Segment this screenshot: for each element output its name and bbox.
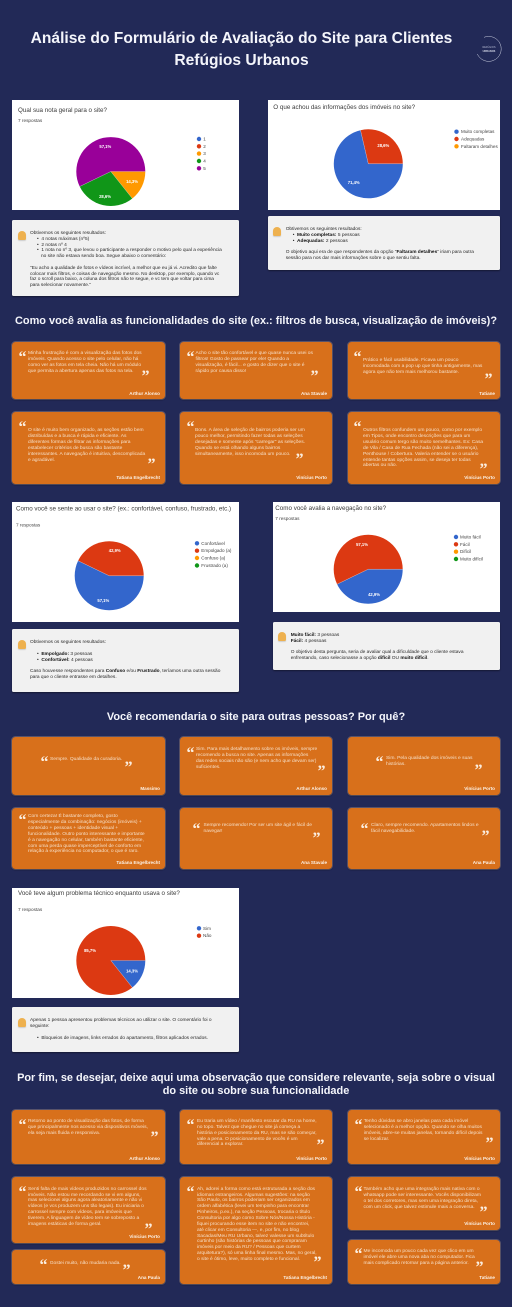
note text: para que o cliente entrasse em detalhes. <box>30 675 117 680</box>
card: Tatiane: mais complicado retornar para a página anterior. <box>364 1261 469 1266</box>
card: Arthur Alonso: ” <box>142 368 150 385</box>
card: Vinícius Porto: ” <box>316 1137 324 1154</box>
card: Ana Stavale: “ <box>192 821 200 838</box>
note text <box>290 632 464 661</box>
card: Vinícius Porto <box>348 737 500 795</box>
card: Tatiana Engelbrecht: idiomas estrangeiros. Algumas sugestões: na seção <box>197 1193 310 1198</box>
card: Vinícius Porto: Bons. A área de seleção de bairros poderia ser um <box>195 428 305 433</box>
card: Ana Stavale: filtros! Gosto de passear por ele! Quando a <box>196 357 289 362</box>
card: Vinícius Porto: ” <box>296 451 304 468</box>
note text: Fácil: 4 pessoas <box>291 639 326 644</box>
panel: como se sente chart: 57,1% <box>97 598 110 603</box>
note text: Obtivemos os seguintes resultados: <box>30 231 106 236</box>
card: Vinícius Porto <box>348 1110 500 1164</box>
card: Vinícius Porto: Vinícius Porto <box>464 475 495 480</box>
panel: informações dos imóveis chart <box>268 100 500 210</box>
card: Tatiana Engelbrecht: fiquei procurando esse item no site e não encontrei, <box>197 1222 309 1227</box>
card: Vinícius Porto: mas selecionei alguns agora aleatoriamente e não vi <box>28 1198 142 1203</box>
note text: O objetivo desta pergunta, seria de avaliar qual a dificuldade que o cliente estava <box>291 650 464 655</box>
card: Ana Stavale <box>180 342 332 399</box>
card: Massimo: ” <box>124 759 132 776</box>
panel: navegação chart: Muito difícil <box>460 556 483 562</box>
note text: Apenas 1 pessoa apresentou problemas técnicos ao utilizar o site. O comentário foi o <box>30 1018 212 1023</box>
panel: navegação chart: 7 respostas <box>275 516 300 521</box>
icon: note marker <box>278 632 286 641</box>
note text: "Eu acho a qualidade de fotos e vídeos incrível, a melhor que eu já vi. Acredito que falte <box>30 266 217 271</box>
card: Tatiana Engelbrecht: O site é muito bem organizado, as seções estão bem <box>28 428 144 433</box>
title: Análise do Formulário de Avaliação do Site para Clientes <box>31 30 452 47</box>
card: Arthur Alonso: “ <box>18 348 26 366</box>
panel: nota geral chart: 1 <box>203 136 206 142</box>
card: Massimo: Massimo <box>140 786 160 791</box>
note: problemas técnicos <box>12 1007 239 1052</box>
card: Vinícius Porto: história e posicionamento da RU, mas se são começar, <box>197 1131 317 1136</box>
card: Arthur Alonso: suficientes. <box>196 765 220 770</box>
card: Tatiana Engelbrecht: ” <box>148 456 156 473</box>
note: resultados sentimento <box>12 629 239 692</box>
card: Ana Stavale <box>180 808 332 869</box>
note: resultados nota geral <box>12 220 239 296</box>
panel: nota geral chart <box>12 100 239 210</box>
heading: observação final: do site ou sobre sua funcionalidade <box>163 1085 349 1097</box>
panel: informações dos imóveis chart: O que achou das informações dos imóveis no site? <box>273 104 416 111</box>
card: Ana Paula: ” <box>482 828 490 845</box>
panel: como se sente chart: 42,9% <box>109 548 121 553</box>
icon: note marker <box>18 230 26 240</box>
card: Vinícius Porto: ” <box>480 1204 488 1220</box>
panel: navegação chart <box>273 502 500 612</box>
note text: no site não estava sendo boa. Segue abaixo o comentário: <box>41 254 166 259</box>
card: Vinícius Porto: no topo. Talvez que chegue no site já começa a <box>197 1125 300 1130</box>
panel: navegação chart: Fácil <box>460 542 470 547</box>
note text: • Bloqueios de imagens, links errados do apartamento, filtros aplicados errados. <box>37 1036 208 1041</box>
panel: nota geral chart: 7 respostas <box>18 118 43 123</box>
card: Vinícius Porto: Vinícius Porto <box>464 786 495 791</box>
panel: nota geral chart: 4 <box>203 158 206 164</box>
card: Ana Stavale: “ <box>186 348 194 366</box>
icon: note marker <box>18 1018 26 1026</box>
panel: navegação chart: Como você avalia a navegação no site? <box>275 505 387 512</box>
card: Vinícius Porto: Tenho dúvidas se abro janelas para cada imóvel <box>364 1119 468 1124</box>
card: Tatiane: “ <box>354 1246 362 1263</box>
card: Ana Paula: “ <box>360 821 368 838</box>
card: Vinícius Porto: imóveis, abre-se muitas janelas, tornando difícil depois <box>364 1131 482 1136</box>
panel: como se sente chart <box>12 502 239 622</box>
note text <box>286 226 474 261</box>
panel: informações dos imóveis chart: 28,6% <box>377 143 390 148</box>
card: Vinícius Porto: diferencial a explorar. <box>197 1142 244 1147</box>
card: Vinícius Porto: “ <box>354 1117 362 1134</box>
card: Tatiana Engelbrecht: ordem alfabética (levei um tempinho para encontrar <box>197 1204 309 1209</box>
card: Tatiana Engelbrecht: São Paulo, os bairros poderiam ser organizados em <box>197 1198 310 1203</box>
card: Vinícius Porto <box>348 412 500 484</box>
card: Tatiana Engelbrecht: ” <box>314 1254 322 1271</box>
note text <box>30 1018 212 1041</box>
card: Tatiane: Tatiane <box>479 390 495 396</box>
card: Tatiana Engelbrecht: o site é ótimo, leve, muito completo e funcional. <box>197 1257 300 1262</box>
panel: nota geral chart: 3 <box>203 151 206 156</box>
card: Vinícius Porto: carrossel sempre com vídeos, para imóveis que <box>28 1210 132 1215</box>
card: Tatiana Engelbrecht: Tatiana Engelbrecht <box>116 860 160 865</box>
card: Tatiana Engelbrecht: Consultoria por algo como Sobre Nós/Nossa História - <box>197 1216 315 1221</box>
note text: • 1 nota no nº 3, que levou o participante a responder o motivo pelo qual a experiência <box>37 248 222 253</box>
card: Tatiana Engelbrecht: “ <box>18 419 26 436</box>
icon: note marker <box>18 640 26 649</box>
card: Vinícius Porto: Eu traria um vídeo / manifesto escutar da RU na home, <box>197 1119 317 1124</box>
card: Vinícius Porto: de Vila / Casa de Rua Fechada (não sei a diferença), <box>363 446 478 451</box>
card: Tatiana Engelbrecht: com uma perda quase imperceptível de conforto em <box>28 844 141 849</box>
card: Vinícius Porto: simultaneamente, isso incomoda um pouco. <box>195 452 290 457</box>
card: Ana Paula: Claro, sempre recomendo. Apartamentos lindos e <box>371 823 479 828</box>
card: Ana Stavale: Acho o site tão confortável e que quase nunca usei os <box>196 351 313 356</box>
icon: note marker <box>273 227 281 236</box>
panel: como se sente chart: Frustrado (a) <box>201 563 228 568</box>
card: Tatiana Engelbrecht: interessantes. A navegação é intuitiva, descomplicada <box>28 452 145 457</box>
card: Ana Paula <box>12 1250 165 1284</box>
panel: nota geral chart: 57,1% <box>99 144 112 149</box>
card: Ana Stavale: Ana Stavale <box>301 390 327 396</box>
note text: • 4 notas máximas (nº5) <box>37 237 89 242</box>
card: Vinícius Porto: entende tantas opções assim, se deseja ter todas <box>363 458 471 463</box>
card: Tatiana Engelbrecht <box>12 808 165 869</box>
card: Tatiana Engelbrecht: e agradável. <box>28 458 55 463</box>
card: Vinícius Porto: desejadas e somente após "carregar" as seleções. <box>195 440 305 445</box>
panel: nota geral chart: 14,3% <box>126 179 138 184</box>
note text: Obtivemos os seguintes resultados: <box>286 227 362 232</box>
card: Vinícius Porto: imagens estáticas de forma geral. <box>28 1222 101 1227</box>
card: Vinícius Porto: tiverem. A linguagem de vídeo tem se sobreposto a <box>28 1216 139 1221</box>
card: Ana Stavale: rápido por causa disso! <box>196 369 246 374</box>
card: Tatiana Engelbrecht <box>180 1177 332 1284</box>
panel: navegação chart: Difícil <box>460 549 471 554</box>
card: Vinícius Porto: vale a pena. O posicionamento de vocês é um <box>197 1137 298 1142</box>
card: Ana Stavale: navegar! <box>204 829 223 834</box>
panel: nota geral chart: 28,6% <box>99 194 111 199</box>
title: Refúgios Urbanos <box>174 52 309 68</box>
card: Vinícius Porto: Vinícius Porto <box>464 1156 495 1161</box>
note text: colocar mais filtros, e coisas de navegação mesmo. No desktop, por exemplo, quando vc <box>30 272 219 277</box>
card: Vinícius Porto: imóveis. Não estou me recordando se vi em alguns, <box>28 1193 141 1198</box>
note text: • Empolgado: 3 pessoas <box>37 652 92 657</box>
card: Massimo: Sempre. Qualidade da curadoria. <box>50 757 122 762</box>
card: Tatiane <box>348 342 500 399</box>
card: Vinícius Porto <box>180 412 332 484</box>
note text: faz o scroll para baixo, a coluna dos filtros não te segue, e vc tem que voltar para cima <box>30 277 214 282</box>
card: Vinícius Porto: ” <box>480 461 488 478</box>
card: Vinícius Porto: em Tipos, onde encontro descrições que para um <box>363 434 470 439</box>
card: Vinícius Porto: “ <box>18 1184 26 1201</box>
card: Tatiana Engelbrecht: curtinho (são histórias de pessoas que compraram <box>197 1239 307 1244</box>
panel: problema técnico chart: 14,3% <box>126 968 138 974</box>
panel: informações dos imóveis chart: Muito completas <box>461 129 495 134</box>
card: Vinícius Porto: histórias. <box>386 762 406 767</box>
panel: nota geral chart: Qual sua nota geral para o site? <box>18 107 107 114</box>
card: Tatiana Engelbrecht: Tatiana Engelbrecht <box>116 475 160 480</box>
note text: Muito fácil: 3 pessoas <box>291 633 339 638</box>
note: resultados navegação <box>273 622 500 670</box>
card: Arthur Alonso: que permita a abertura apenas das fotos na tela. <box>28 369 134 374</box>
card: Tatiane: agora que não tem mais melhorou bastante. <box>363 370 459 375</box>
card: Vinícius Porto: Vinícius Porto <box>296 1156 327 1161</box>
card: Vinícius Porto <box>180 1110 332 1164</box>
card: Arthur Alonso: “ <box>18 1117 26 1134</box>
card: Vinícius Porto: usuário comum tergo são muito semelhantes. Ex: Casa <box>363 440 483 445</box>
card: Ana Stavale: ” <box>312 830 320 847</box>
card: Tatiane: “ <box>354 348 362 366</box>
card: Arthur Alonso: que principalmente nos acesso via dispositivos móveis, <box>28 1125 148 1130</box>
panel: problema técnico chart: 85,7% <box>84 948 96 953</box>
card: Vinícius Porto: ” <box>486 1135 494 1152</box>
card: Vinícius Porto: abertas ou não. <box>363 463 397 468</box>
heading: recomendação: Você recomendaria o site para outras pessoas? Por quê? <box>107 711 405 723</box>
card: Ana Paula: fácil navegabilidade. <box>371 829 415 834</box>
card: Vinícius Porto: se localizar. <box>364 1137 389 1142</box>
card: Vinícius Porto: Também acho que uma integração mais nativa com o <box>364 1187 480 1192</box>
card: Vinícius Porto: ” <box>144 1221 152 1238</box>
panel: como se sente chart: Como você se sente ao usar o site? (ex.: confortável, confuso, frustrado, etc.) <box>16 505 231 512</box>
card: Arthur Alonso: Retorno ao ponto de visualização das fotos, de forma <box>28 1119 144 1124</box>
card: Tatiana Engelbrecht: estabelecer critérios de busca são bastante <box>28 446 122 451</box>
card: Arthur Alonso: Arthur Alonso <box>129 390 160 396</box>
note text: Caso houvesse respondentes para Confuso e/ou Frustrado, teríamos uma outra sessão <box>30 669 220 674</box>
card: Tatiane: ” <box>476 1259 484 1276</box>
card: Arthur Alonso: das redes sociais não são (e nem acho que devam ser) <box>196 759 316 764</box>
card: Ana Stavale: ” <box>310 368 318 385</box>
card: Massimo: “ <box>40 754 48 771</box>
card: Arthur Alonso <box>12 1110 165 1164</box>
card: Tatiana Engelbrecht: distribuídas e a busca é rápida e eficiente. As <box>28 434 126 439</box>
card: Vinícius Porto <box>348 1177 500 1230</box>
card: Vinícius Porto: selecionado é a melhor opção. Quando se olha muitos <box>364 1125 482 1130</box>
card: Vinícius Porto: Vinícius Porto <box>296 475 327 480</box>
card: Vinícius Porto: com um click, que talvez estimule mais a conversa. <box>364 1205 475 1210</box>
logo: Refúgios Urbanos <box>477 36 502 62</box>
card: Tatiana Engelbrecht: Pinheiros, p.ex.), na seção Pessoas, trocaria o título <box>197 1210 310 1215</box>
card: Tatiana Engelbrecht: imóveis por meio da RU? / Pessoas que curtem <box>197 1245 301 1250</box>
card: Tatiane: incomodada com a pop up que tinha antigamente, mas <box>363 364 482 369</box>
card: Tatiana Engelbrecht: especialmente da combinação: negócios (imóveis) + <box>28 820 142 825</box>
card: Tatiana Engelbrecht: Sacadas/Meu RU Urbano, talvez valesse um subtítulo <box>197 1234 314 1239</box>
panel: como se sente chart: Confortável <box>201 541 225 546</box>
card: Tatiana Engelbrecht: “ <box>18 812 26 829</box>
panel: navegação chart: Muito fácil <box>460 534 481 540</box>
card: Vinícius Porto: Sim. Pela qualidade dos imóveis e suas <box>386 756 472 761</box>
card: Arthur Alonso: imóveis. Quando acesso o site pelo celular, não há <box>28 357 138 362</box>
card: Ana Paula <box>348 808 500 869</box>
card: Tatiane: imóvel ele abre uma nova aba no computador. Fica <box>364 1255 475 1260</box>
card: Tatiana Engelbrecht <box>12 412 165 484</box>
card: Arthur Alonso: como ver as fotos em tela cheia. Não há um módulo <box>28 363 141 368</box>
heading: funcionalidades: Como você avalia as funcionalidades do site (ex.: filtros de busca, visualização de imóveis)? <box>15 315 497 327</box>
panel: problema técnico chart: 7 respostas <box>18 907 43 912</box>
panel: nota geral chart: 5 <box>203 166 206 171</box>
card: Tatiana Engelbrecht: “ <box>186 1184 194 1201</box>
card: Vinícius Porto: o tel dos corretores, mas sem uma integração direta, <box>364 1199 478 1204</box>
note text <box>30 230 222 288</box>
panel: problema técnico chart: Sim <box>203 926 211 931</box>
card: Arthur Alonso <box>180 737 332 795</box>
card: Tatiana Engelbrecht: até clicar em Consultoria —, e, por fim, no blog <box>197 1228 299 1233</box>
card: Ana Stavale: Sempre recomendo! Por ser um site ágil e fácil de <box>204 823 312 828</box>
card: Ana Stavale: visualização, é fácil... e gosto de dizer que o site é <box>196 363 305 368</box>
card: Tatiana Engelbrecht: arquitetura?), só uma linha final mesmo. Mas, no geral, <box>197 1251 317 1256</box>
note text: • Muito completas: 5 pessoas <box>293 233 360 238</box>
panel: problema técnico chart <box>12 888 239 998</box>
card: Tatiane: Prático e fácil usabilidade. Ficava um pouco <box>363 358 458 363</box>
card: Tatiana Engelbrecht: Ah, adorei a forma como está estruturada a seção dos <box>197 1187 315 1192</box>
card: Vinícius Porto: Vinícius Porto <box>129 1234 160 1239</box>
note text: enfrentando, caso selecionasse a opção difícil OU muito difícil. <box>291 656 429 661</box>
note text: seguinte: <box>30 1024 49 1029</box>
panel: navegação chart: 42,9% <box>368 592 380 597</box>
card: Vinícius Porto: Senti falta de mais vídeos produzidos no carrossel dos <box>28 1187 147 1192</box>
card: Vinícius Porto: “ <box>186 1117 194 1134</box>
card: Vinícius Porto: ” <box>474 762 482 779</box>
card: Tatiane: Tatiane <box>479 1275 495 1280</box>
card: Arthur Alonso: ” <box>318 763 326 780</box>
card: Arthur Alonso: recomendo a busca no site. Apenas as informações <box>196 753 308 758</box>
panel: problema técnico chart: Não <box>203 933 212 938</box>
panel: nota geral chart: 2 <box>203 144 206 149</box>
card: Tatiana Engelbrecht: relação à experiência no computador, o que é raro. <box>28 849 139 854</box>
panel: navegação chart: 57,1% <box>356 542 368 547</box>
note text: Obtivemos os seguintes resultados: <box>30 640 106 645</box>
title <box>31 30 452 68</box>
panel: informações dos imóveis chart: 71,4% <box>348 180 360 185</box>
card: Tatiane: ” <box>484 371 492 388</box>
note text <box>30 640 220 680</box>
heading: observação final <box>17 1072 495 1097</box>
card: Ana Paula: Gostei muito, não mudaria nada. <box>50 1261 121 1266</box>
heading: observação final: Por fim, se desejar, deixe aqui uma observação que considere relevante, seja sobre o visual <box>17 1072 495 1084</box>
card: Massimo <box>12 737 165 795</box>
card: Ana Paula: Ana Paula <box>473 860 495 865</box>
panel: informações dos imóveis chart: Faltaram detalhes <box>461 144 498 149</box>
card: Tatiana Engelbrecht: conteúdo + pessoas + identidade visual + <box>28 826 118 831</box>
card: Vinícius Porto <box>12 1177 165 1243</box>
card: Ana Paula: “ <box>40 1257 48 1274</box>
logo: Refúgios Urbanos: URBANOS <box>483 50 496 53</box>
card: Tatiana Engelbrecht: Tatiana Engelbrecht <box>283 1275 327 1280</box>
card: Arthur Alonso: ela seja mais fluida e responsiva. <box>28 1131 100 1136</box>
note text: • 2 notas nº 4 <box>37 243 67 248</box>
card: Arthur Alonso: Minha frustração é com a visualização das fotos dos <box>28 351 142 356</box>
card: Vinícius Porto: pouco melhor, permitindo fazer todas as seleções <box>195 434 303 439</box>
card: Tatiane <box>348 1240 500 1284</box>
card: Tatiana Engelbrecht: diferentes formas de filtrar as informações para <box>28 440 130 445</box>
card: Tatiana Engelbrecht: é a navegação no celular, também bastante eficiente, <box>28 838 144 843</box>
note: resultados informações <box>268 216 500 270</box>
card: Vinícius Porto: Penthouse / Cobertura. Valeria entender se o usuário <box>363 452 478 457</box>
card: Vinícius Porto: “ <box>354 419 362 436</box>
card: Ana Stavale: Ana Stavale <box>301 860 327 865</box>
note text: • Confortável: 4 pessoas <box>37 658 93 663</box>
card: Tatiana Engelbrecht: Com certeza! É bastante completo, gosto <box>28 814 118 819</box>
panel: como se sente chart: Confuso (a) <box>201 556 226 560</box>
note text: • Adequadas: 2 pessoas <box>293 239 348 244</box>
card: Vinícius Porto: Outros filtros confundem um pouco, como por exemplo <box>363 428 482 433</box>
card: Ana Paula: Ana Paula <box>138 1275 160 1280</box>
note text: sessão para nos dar mais informações sobre o que sentiu falta. <box>286 256 421 261</box>
panel: como se sente chart: Empolgado (a) <box>201 548 232 553</box>
card: Tatiana Engelbrecht: funcionalidade. Outro ponto interessante e importante <box>28 832 145 837</box>
panel: informações dos imóveis chart: Adequadas <box>461 136 485 142</box>
card: Tatiane: Me incomoda um pouco cada vez que clico em um <box>364 1249 474 1254</box>
logo: Refúgios Urbanos: REFÚGIOS <box>482 46 496 49</box>
panel: como se sente chart: 7 respostas <box>16 522 41 528</box>
card: Arthur Alonso: Arthur Alonso <box>129 1156 160 1161</box>
card: Ana Paula: ” <box>122 1262 130 1278</box>
card: Arthur Alonso <box>12 342 165 399</box>
card: Vinícius Porto: Quando se está olhando alguns bairros <box>195 446 280 451</box>
note text: para selecionar novamente." <box>30 283 91 288</box>
card: Arthur Alonso: Sim. Para mais detalhamento sobre os imóveis, sempre <box>196 747 317 752</box>
card: Arthur Alonso: Arthur Alonso <box>296 786 327 791</box>
card: Vinícius Porto: whatsapp pode ser interessante. Vocês disponibilizam <box>364 1193 481 1198</box>
card: Vinícius Porto: vídeos (e vcs produzem uns tão legais). Eu iniciaria o <box>28 1204 144 1209</box>
card: Vinícius Porto: “ <box>186 419 194 436</box>
card: Arthur Alonso: ” <box>150 1129 158 1146</box>
card: Arthur Alonso: “ <box>186 744 194 762</box>
note text: O objetivo aqui era de que respondentes da opção "Faltaram detalhes" iriam para outra <box>286 250 474 255</box>
card: Vinícius Porto: “ <box>354 1184 362 1201</box>
panel: problema técnico chart: Você teve algum problema técnico enquanto usava o site? <box>18 890 180 897</box>
card: Vinícius Porto: Vinícius Porto <box>464 1221 495 1226</box>
card: Vinícius Porto: “ <box>376 754 384 771</box>
